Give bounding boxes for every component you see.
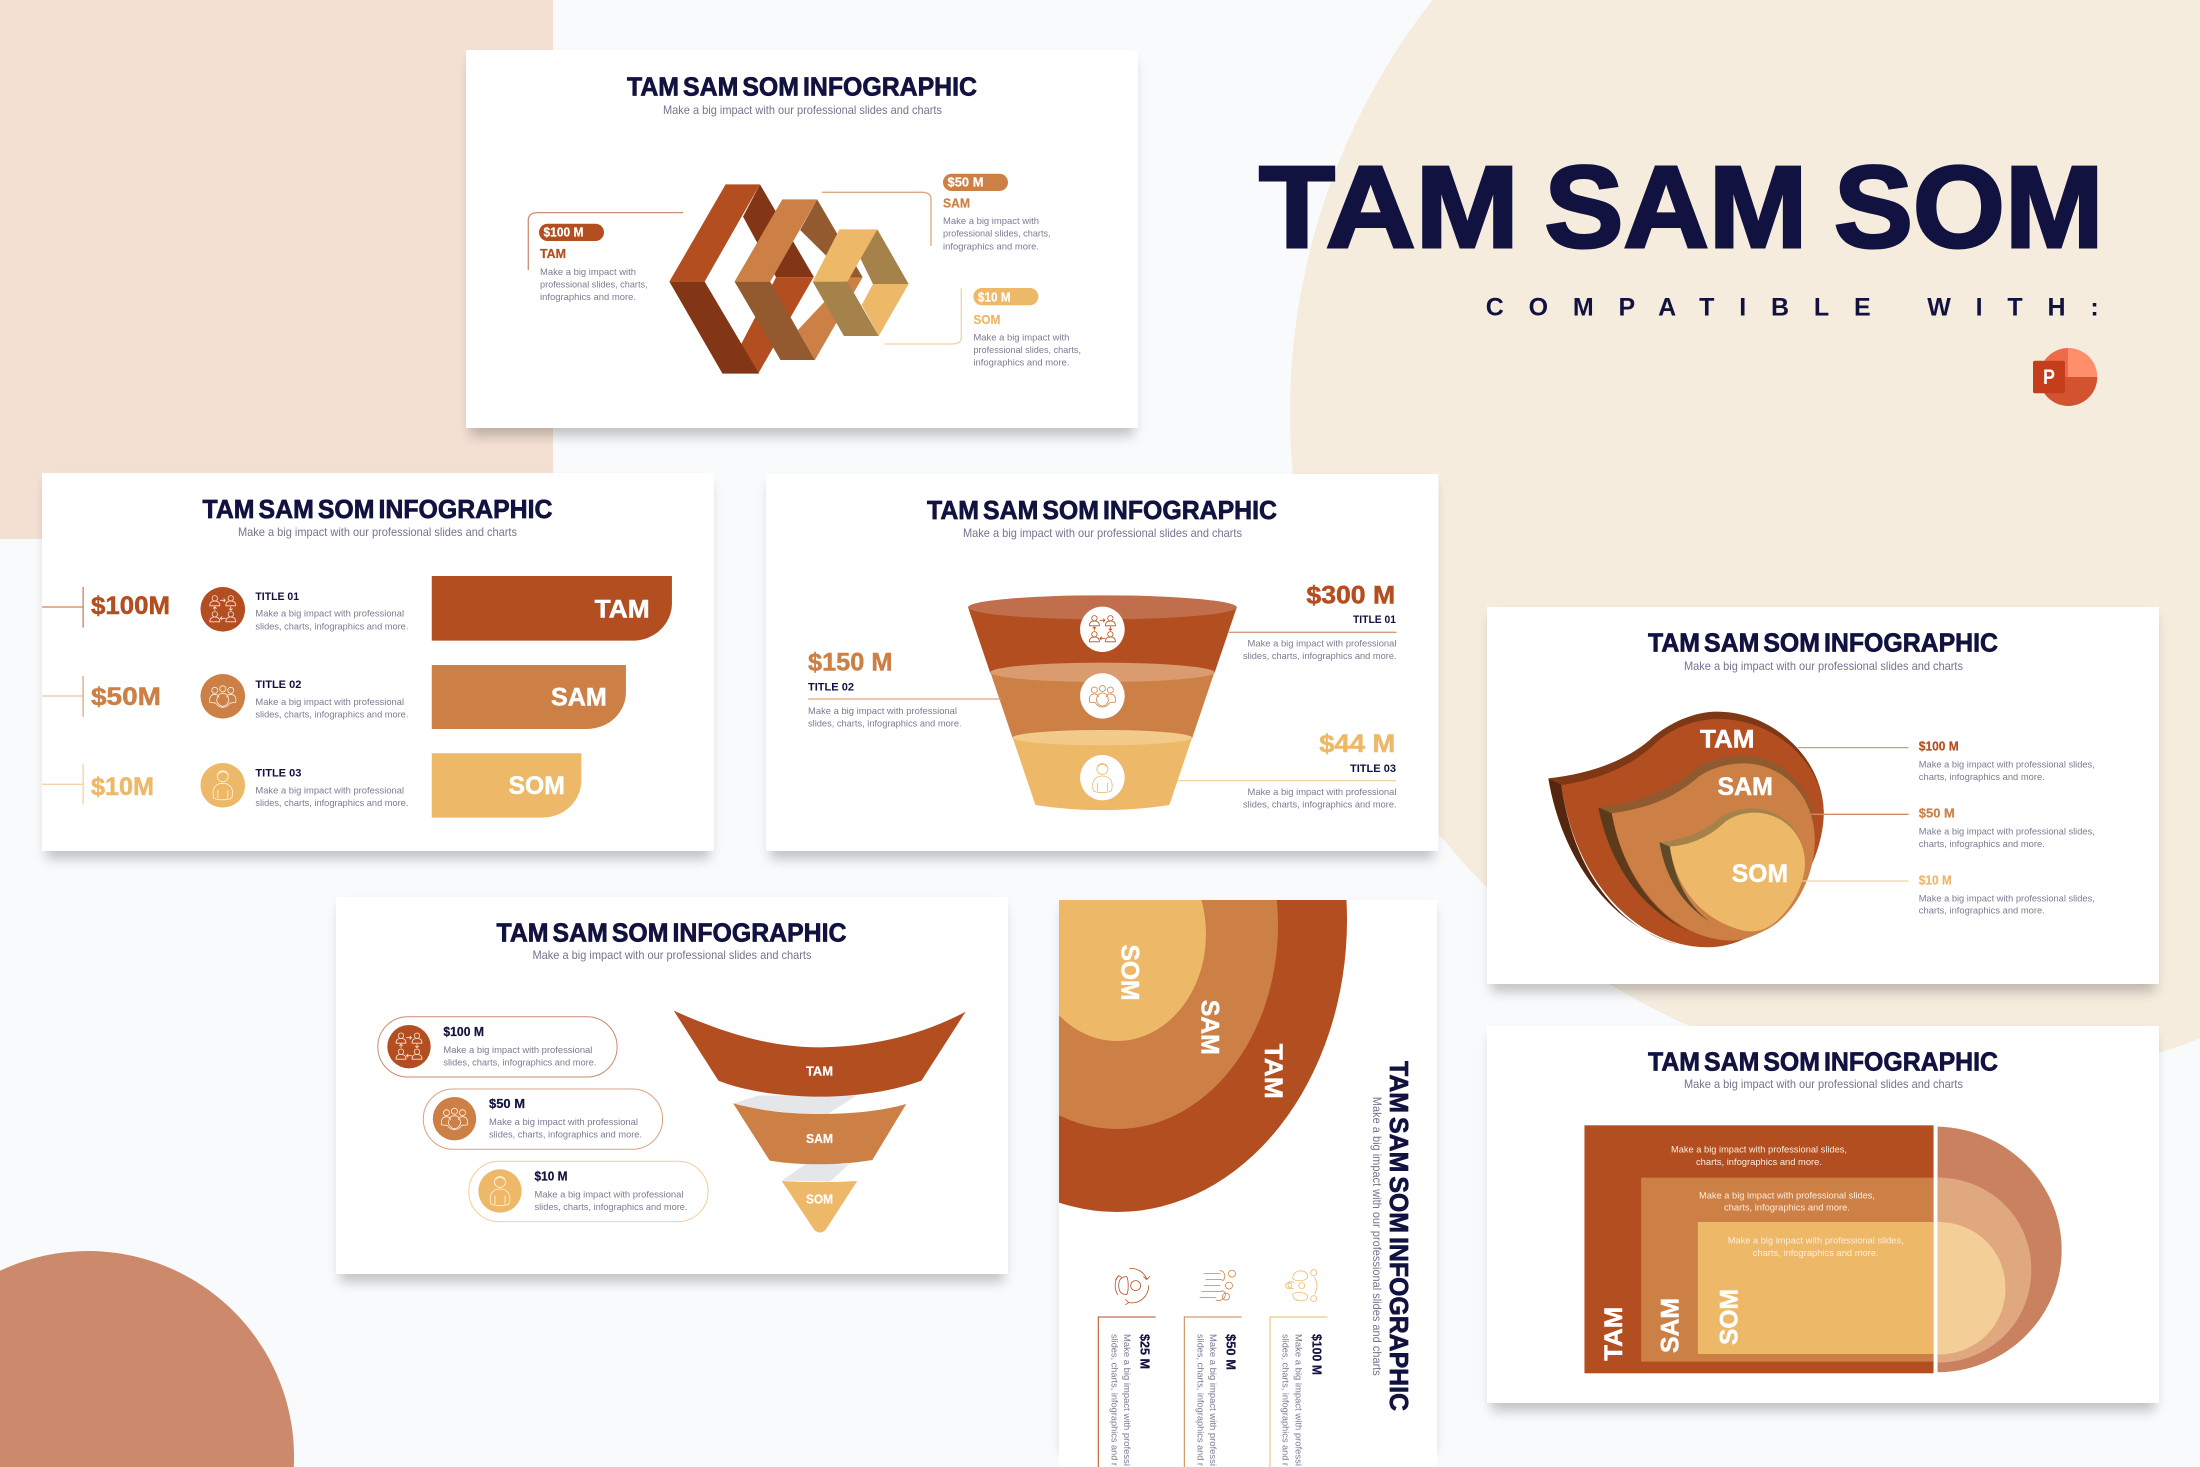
card: $50 M <box>1184 1317 1242 1467</box>
icon: person circle <box>200 763 245 808</box>
callout: $300 M: TITLE 01 <box>1353 614 1396 626</box>
text block 01: slides, charts, infographics and more. <box>255 621 408 632</box>
bar labels: SOM <box>508 772 565 800</box>
card: $25 M: Make a big impact with professi <box>1121 1334 1132 1466</box>
SOM note: charts, infographics and more. <box>1753 1248 1879 1259</box>
funnel labels <box>806 1064 833 1206</box>
nested rectangles and half circles <box>1584 1125 2062 1373</box>
icon: person <box>1093 764 1112 792</box>
note: $10 M: Make a big impact with professional slides, <box>1919 893 2095 904</box>
icon: powerpoint logo: P <box>2043 366 2055 389</box>
callout: SAM: $50 M <box>948 176 984 190</box>
panel: pills and funnel slide <box>336 897 1008 1282</box>
pill card: $10 M: $10 M <box>534 1169 568 1183</box>
card: $100 M <box>1270 1317 1327 1467</box>
callout: $150 M: TITLE 02 <box>808 682 854 694</box>
slide subtitle: Make a big impact with our professional slides and charts <box>963 526 1242 540</box>
card: $50 M: Make a big impact with professi <box>1207 1334 1218 1466</box>
bars and connector lines <box>42 576 672 818</box>
pill card: $100 M: $100 M <box>443 1025 484 1039</box>
text block 03 <box>255 767 408 809</box>
panel: rotated circles slide <box>1057 900 1439 1467</box>
text block 02: Make a big impact with professional <box>255 697 404 708</box>
callout: SAM: professional slides, charts, <box>943 229 1051 240</box>
note: $50 M: Make a big impact with professional slides, <box>1919 826 2095 837</box>
main heading: SOM <box>1834 142 2104 272</box>
pill card: $10 M <box>469 1161 708 1222</box>
panel: chevron slide <box>466 50 1138 436</box>
concentric circles <box>1059 900 1347 1212</box>
slide subtitle: Make a big impact with our professional slides and charts <box>663 103 942 117</box>
main heading: TAM <box>1259 142 1519 272</box>
note: $100 M: $100 M <box>1919 740 1959 754</box>
icon: team circle <box>1286 1270 1317 1302</box>
card: $25 M <box>1098 1317 1156 1467</box>
callout: TAM: TAM <box>540 247 566 261</box>
main heading: SAM <box>1544 142 1808 272</box>
text block 02: slides, charts, infographics and more. <box>255 710 408 721</box>
icon: team circle <box>200 587 245 632</box>
card: $100 M: slides, charts, infographics and r <box>1280 1334 1291 1466</box>
TAM note <box>1671 1144 1847 1168</box>
panel: nested rectangles slide <box>1487 1026 2159 1411</box>
callout: SAM <box>943 174 1051 252</box>
callout: $300 M <box>1243 581 1397 662</box>
callout: TAM: infographics and more. <box>540 292 636 303</box>
slide title: TAM SAM SOM INFOGRAPHIC <box>202 494 553 524</box>
callout: $44 M <box>1243 730 1397 811</box>
card: $50 M: $50 M <box>1224 1334 1238 1370</box>
pill card: $100 M: slides, charts, infographics and more. <box>443 1057 596 1068</box>
bar labels: TAM <box>595 595 650 623</box>
pill card: $50 M: $50 M <box>489 1097 525 1111</box>
rotated labels: SOM <box>1716 1289 1744 1345</box>
funnel labels: SAM <box>806 1132 833 1146</box>
TAM note: Make a big impact with professional slides, <box>1671 1144 1847 1155</box>
SOM note: Make a big impact with professional slides, <box>1728 1236 1904 1247</box>
text block 02: TITLE 02 <box>255 679 301 691</box>
slide subtitle: Make a big impact with our professional slides and charts <box>1684 1077 1963 1091</box>
slide title: TAM SAM SOM INFOGRAPHIC <box>1384 1061 1414 1411</box>
funnel chart <box>674 1011 966 1232</box>
callout: $300 M: Make a big impact with professional <box>1248 638 1396 649</box>
cone funnel chart <box>808 595 1397 810</box>
icon: group circle <box>200 674 245 719</box>
note: $50 M: $50 M <box>1919 807 1955 821</box>
rotated labels: TAM <box>1600 1307 1628 1361</box>
card: $100 M: Make a big impact with professi <box>1293 1334 1304 1466</box>
text block 01: Make a big impact with professional <box>255 609 404 620</box>
SAM note: Make a big impact with professional slides, <box>1699 1190 1875 1201</box>
callout: SOM <box>973 288 1081 369</box>
pill card: $100 M: Make a big impact with professional <box>443 1045 592 1056</box>
pill card: $10 M: slides, charts, infographics and more. <box>534 1202 688 1213</box>
background: peach block <box>0 0 553 539</box>
callout: $44 M: slides, charts, infographics and more. <box>1243 800 1397 811</box>
pill card: $50 M: Make a big impact with professional <box>489 1117 638 1128</box>
rotated labels: SAM <box>1657 1298 1685 1353</box>
note: $50 M <box>1919 807 2095 850</box>
shield labels: TAM <box>1700 725 1754 753</box>
callout: $44 M: TITLE 03 <box>1350 763 1396 775</box>
shield labels: SAM <box>1718 773 1773 801</box>
slide title: TAM SAM SOM INFOGRAPHIC <box>1648 627 1998 657</box>
panel: shield slide <box>1487 607 2159 992</box>
values: $100M <box>91 592 170 620</box>
icon: cycle person <box>1115 1269 1150 1305</box>
callout: $150 M: $150 M <box>808 649 892 677</box>
text block 03: TITLE 03 <box>255 767 301 779</box>
values: $50M <box>91 683 161 711</box>
pill card: $10 M: Make a big impact with professional <box>534 1189 684 1200</box>
icon: hands and people <box>1200 1270 1236 1301</box>
card: $50 M: slides, charts, infographics and r <box>1195 1334 1206 1466</box>
nested shield diagram <box>1548 712 1909 947</box>
pill card: $100 M <box>378 1017 617 1077</box>
bar labels: SAM <box>551 684 607 712</box>
rotated labels <box>1600 1289 1744 1361</box>
shield labels <box>1700 725 1788 888</box>
text block 02 <box>255 679 408 721</box>
callout: SOM: SOM <box>973 313 1000 327</box>
SAM note: charts, infographics and more. <box>1724 1203 1850 1214</box>
callout: $150 M: slides, charts, infographics and more. <box>808 719 962 730</box>
note: $10 M: charts, infographics and more. <box>1919 906 2045 917</box>
icon: group <box>1089 686 1116 707</box>
slide subtitle: Make a big impact with our professional slides and charts <box>532 948 812 962</box>
TAM note: charts, infographics and more. <box>1696 1157 1822 1168</box>
text block 01 <box>255 591 408 632</box>
callout: SAM: infographics and more. <box>943 241 1039 252</box>
card: $100 M: $100 M <box>1309 1334 1323 1375</box>
main heading <box>1259 142 2104 272</box>
note: $10 M: $10 M <box>1919 873 1952 887</box>
slide title: TAM SAM SOM INFOGRAPHIC <box>627 72 977 102</box>
compatible with line: COMPATIBLE WITH: <box>1486 294 2099 322</box>
background: salmon circle <box>0 1251 294 1467</box>
SOM note <box>1728 1236 1904 1259</box>
pill card: $50 M: slides, charts, infographics and more. <box>489 1130 642 1141</box>
slide title: TAM SAM SOM INFOGRAPHIC <box>1648 1046 1998 1076</box>
callout: SOM: infographics and more. <box>973 358 1069 369</box>
circle labels: SOM <box>1116 944 1144 1000</box>
text block 03: Make a big impact with professional <box>255 785 404 796</box>
circle labels: SAM <box>1196 1000 1224 1055</box>
circle labels: TAM <box>1259 1044 1287 1099</box>
chevron diagram <box>528 184 961 374</box>
card: $25 M: $25 M <box>1138 1334 1152 1369</box>
note: $100 M: charts, infographics and more. <box>1919 772 2045 783</box>
funnel labels: TAM <box>806 1064 833 1078</box>
callout: SOM: Make a big impact with <box>973 332 1069 343</box>
panel: cone funnel slide <box>766 474 1438 859</box>
slide title: TAM SAM SOM INFOGRAPHIC <box>496 918 847 948</box>
icon: powerpoint logo <box>2033 348 2097 406</box>
values <box>91 592 170 801</box>
note: $10 M <box>1919 873 2095 917</box>
slide subtitle: Make a big impact with our professional slides and charts <box>1370 1097 1384 1376</box>
callout: TAM <box>539 224 648 303</box>
shield labels: SOM <box>1732 860 1788 888</box>
callout: SAM: Make a big impact with <box>943 216 1039 227</box>
card: $25 M: slides, charts, infographics and r <box>1109 1334 1120 1466</box>
text block 03: slides, charts, infographics and more. <box>255 798 408 809</box>
funnel labels: SOM <box>806 1192 833 1206</box>
callout: $300 M: $300 M <box>1306 581 1395 609</box>
callout: TAM: Make a big impact with <box>540 267 636 278</box>
icon: team <box>1089 616 1115 642</box>
slide title: TAM SAM SOM INFOGRAPHIC <box>927 495 1277 525</box>
SAM note <box>1699 1190 1875 1214</box>
bar labels <box>508 595 650 800</box>
note: $50 M: charts, infographics and more. <box>1919 839 2045 850</box>
pill card: $50 M <box>423 1089 663 1149</box>
callout: $300 M: slides, charts, infographics and more. <box>1243 651 1397 662</box>
slide subtitle: Make a big impact with our professional slides and charts <box>238 525 517 539</box>
callout: $150 M <box>808 649 962 730</box>
callout: $44 M: Make a big impact with professional <box>1248 787 1396 798</box>
callout: SOM: $10 M <box>978 290 1011 304</box>
background: cream circle <box>1290 0 2200 1083</box>
note: $100 M: Make a big impact with professional slides, <box>1919 760 2095 771</box>
text block 01: TITLE 01 <box>255 591 299 603</box>
note: $100 M <box>1919 740 2095 783</box>
callout: TAM: $100 M <box>544 226 584 240</box>
callout: TAM: professional slides, charts, <box>540 280 648 291</box>
callout: $150 M: Make a big impact with professional <box>808 706 957 717</box>
circle labels <box>1116 944 1287 1099</box>
panel: bars slide <box>42 473 714 859</box>
callout: SAM: SAM <box>943 196 970 210</box>
values: $10M <box>91 773 154 801</box>
callout: $44 M: $44 M <box>1319 730 1395 758</box>
callout: SOM: professional slides, charts, <box>973 345 1081 356</box>
slide subtitle: Make a big impact with our professional slides and charts <box>1684 659 1963 673</box>
